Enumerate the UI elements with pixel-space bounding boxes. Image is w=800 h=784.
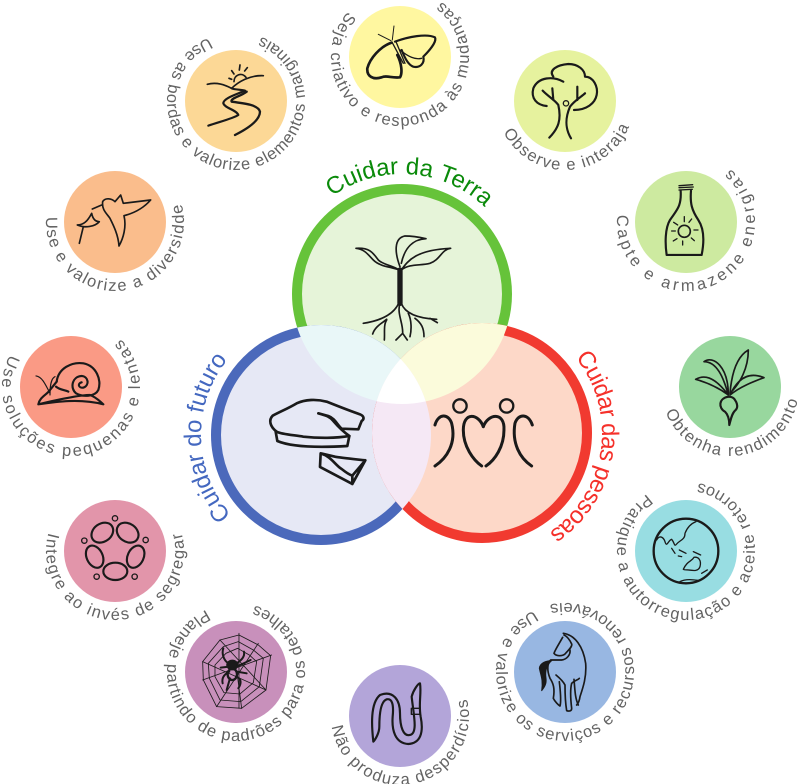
label: Seja criativo e responda às mudanças	[330, 3, 469, 130]
panel: Pratique a autorregulação	[616, 484, 756, 622]
label: Planeje partindo de padrões para os detalhes	[164, 606, 306, 744]
label: Observe e interaja	[505, 124, 630, 170]
icon: spider and web	[203, 633, 272, 708]
label: Use as bordas e valorize elementos marginais	[166, 38, 306, 170]
heading: Cuidar das pessoas: Cuidar das pessoas	[551, 352, 620, 541]
icon: butterfly	[367, 26, 435, 78]
overlap: futuro and pessoas	[372, 398, 431, 509]
disc	[20, 336, 122, 438]
panel: Seja criativo	[330, 3, 469, 130]
disc	[635, 171, 737, 273]
circle: Cuidar das pessoas	[377, 328, 587, 538]
disc	[185, 50, 287, 152]
heading: Cuidar do futuro: Cuidar do futuro	[184, 354, 228, 522]
icon: stones	[270, 400, 365, 484]
disc	[679, 336, 781, 438]
label: Obtenha rendimento	[667, 399, 797, 456]
heading: Cuidar da Terra: Cuidar da Terra	[327, 157, 490, 207]
icon: five rounded forms	[82, 516, 148, 580]
overlap: terra and futuro	[297, 325, 400, 401]
circle: Cuidar da Terra	[297, 189, 507, 399]
label: Integre ao invés de segregar	[45, 534, 188, 620]
disc	[64, 171, 166, 273]
icon: worm	[372, 683, 422, 744]
overlap: terra and pessoas	[400, 323, 508, 402]
icon: people forming a heart	[435, 399, 532, 466]
label: Use e valorize a diversidde	[46, 205, 184, 291]
disc	[514, 50, 616, 152]
panel: Use soluções pequenas e lentas	[2, 336, 140, 460]
icon: hummingbird and flower	[77, 195, 151, 246]
panel: Use as bordas	[166, 38, 306, 170]
panel: Integre ao invés de segregar	[45, 500, 188, 620]
panel: Planeje partindo de padrões	[164, 606, 306, 744]
icon: bottle with sun	[666, 185, 703, 255]
label: Pratique a autorregulação e aceite retornos	[616, 484, 756, 622]
disc	[349, 6, 451, 108]
panel: Venn diagram of three ethics	[211, 189, 592, 545]
label: Use soluções pequenas e lentas	[2, 340, 140, 460]
disc	[349, 665, 451, 767]
panel: Capte e armazene energias	[616, 170, 756, 292]
disc	[514, 621, 616, 723]
icon: seedling with roots	[356, 236, 451, 340]
disc	[185, 621, 287, 723]
disc	[635, 500, 737, 602]
icon: horse	[539, 633, 586, 711]
circle: Cuidar do futuro	[216, 330, 426, 540]
disc	[64, 500, 166, 602]
icon: winding road and sun	[207, 65, 263, 135]
icon: beet	[696, 350, 764, 425]
panel: Use e valorize a diversidade	[46, 171, 184, 291]
panel: Observe e interaja	[505, 50, 630, 170]
panel: Obtenha rendimento	[667, 336, 797, 456]
icon: tree	[533, 64, 597, 138]
panel: Não produza desperdícios	[332, 665, 470, 784]
label: Capte e armazene energias	[616, 170, 756, 292]
panel: Use e valorize os serviços	[496, 602, 634, 743]
overlap: white centre of the three circles	[377, 359, 426, 404]
icon: globe	[654, 519, 718, 583]
label: Use e valorize os serviços e recursos renováveis	[496, 602, 634, 743]
icon: snail	[36, 363, 103, 404]
